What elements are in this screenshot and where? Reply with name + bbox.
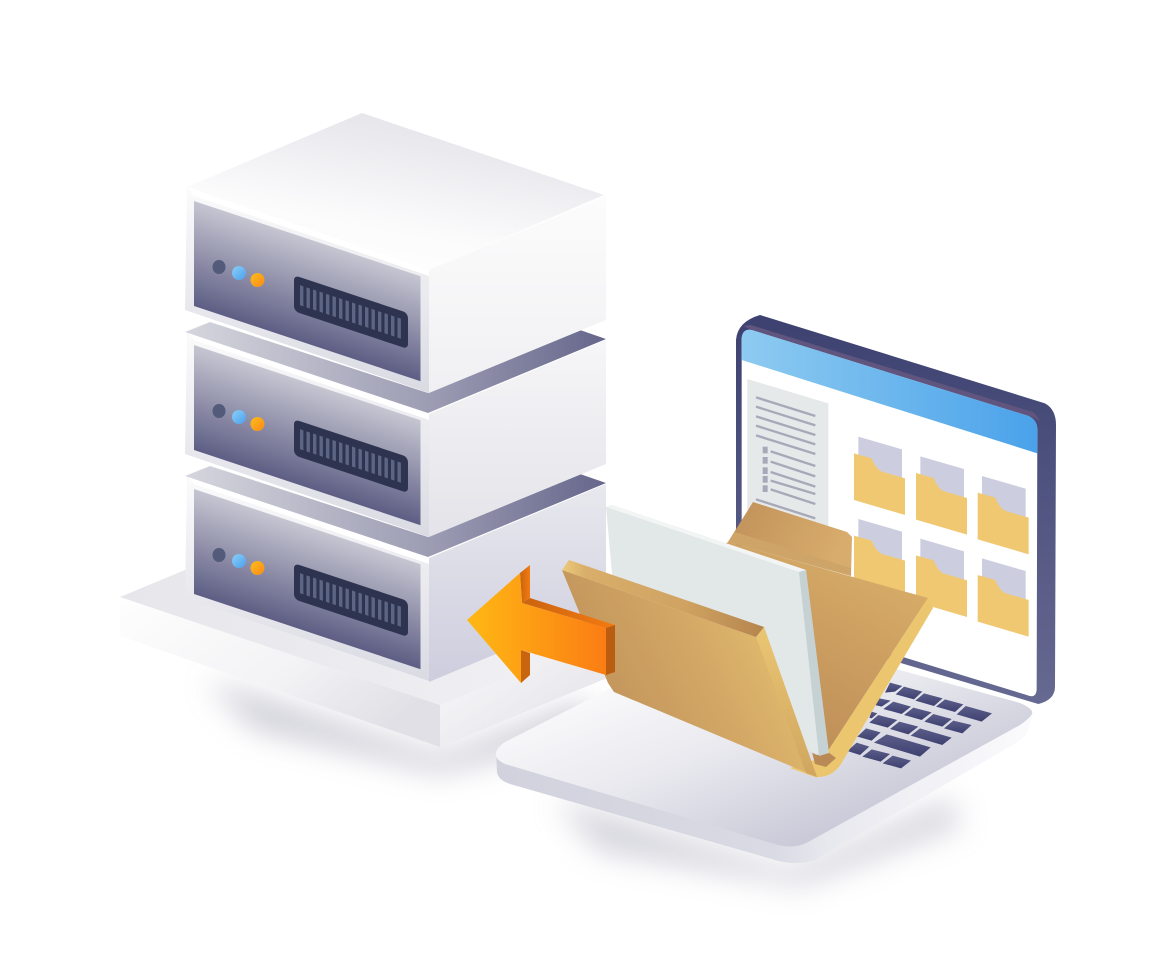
window title bar xyxy=(742,330,1037,453)
server base plate xyxy=(120,570,607,747)
server gap: upper xyxy=(185,322,606,413)
bezel inner highlight xyxy=(743,325,1040,422)
screen display xyxy=(742,330,1037,696)
folder back panel xyxy=(700,542,928,757)
folder front panel xyxy=(562,560,817,777)
large open folder xyxy=(562,502,933,777)
folder rim xyxy=(790,598,933,777)
laptop base xyxy=(496,625,1032,863)
server gap: lower xyxy=(185,466,606,557)
screen bezel xyxy=(736,315,1056,704)
arrow pointing to server xyxy=(467,565,615,683)
document panel xyxy=(747,379,828,577)
server unit: top xyxy=(185,113,606,393)
folder pocket xyxy=(812,752,836,767)
folder icons grid xyxy=(854,437,1029,637)
folder tab xyxy=(728,502,852,576)
folder tab crease xyxy=(728,532,851,576)
server unit: middle xyxy=(185,331,606,537)
laptop screen xyxy=(736,315,1056,704)
shadow: laptop xyxy=(555,800,960,885)
server unit: bottom xyxy=(185,475,606,682)
laptop keyboard xyxy=(847,683,992,768)
shadow: server xyxy=(205,680,590,772)
paper sheet xyxy=(606,505,829,756)
